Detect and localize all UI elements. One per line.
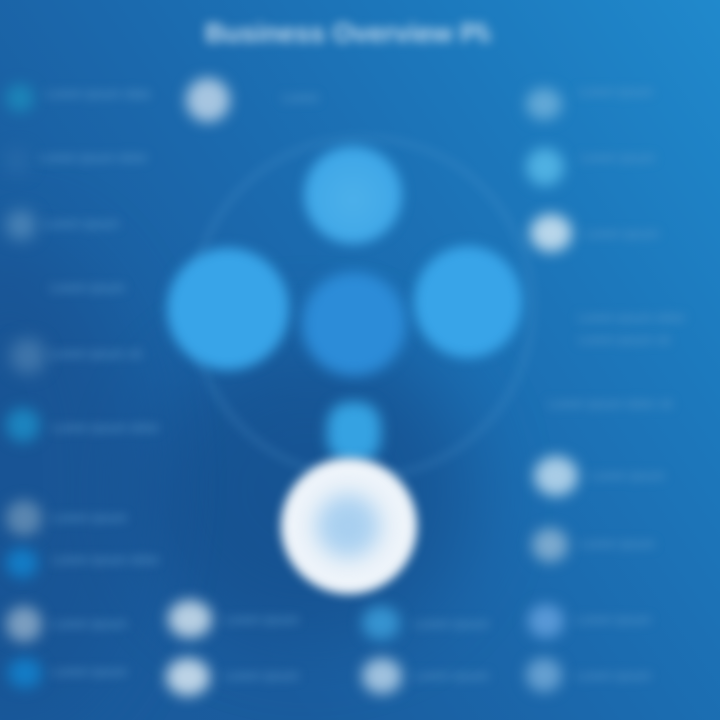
diagram: white hub [281, 458, 417, 594]
infographic background: Lorem ipsum [580, 536, 655, 551]
diagram: right node [414, 246, 522, 358]
infographic background: Lorem ipsum [414, 668, 489, 683]
infographic background: Lorem ipsum dolor [52, 552, 160, 567]
infographic background: Lorem ipsum [52, 510, 127, 525]
top middle text: Lorem [282, 90, 319, 105]
infographic background: Lorem ipsum dolor [578, 310, 686, 325]
infographic background: Lorem ipsum [52, 664, 127, 679]
bottom middle text [224, 612, 489, 683]
dark vignette behind diagram [150, 340, 470, 640]
infographic background: Lorem ipsum [50, 280, 125, 295]
infographic background: Lorem ipsum sit [50, 346, 142, 361]
infographic background: Lorem ipsum data [46, 86, 150, 101]
infographic background: Lorem ipsum dolor sit [548, 396, 672, 411]
infographic background: Lorem ipsum [576, 668, 651, 683]
infographic background: Lorem ipsum [224, 612, 299, 627]
diagram: left node [167, 248, 289, 370]
right column icons [520, 82, 587, 699]
infographic background: Lorem ipsum [590, 468, 665, 483]
bottom middle icons [156, 590, 411, 706]
diagram: connector node [327, 402, 381, 462]
diagram: top node [304, 146, 402, 244]
infographic background: Lorem ipsum [578, 84, 653, 99]
right column text [548, 84, 686, 683]
infographic background: Lorem ipsum [224, 668, 299, 683]
left dark edge [0, 240, 140, 720]
infographic background: Lorem ipsum [576, 612, 651, 627]
diagram: white hub inner [316, 494, 380, 558]
infographic background: Lorem ipsum sit [578, 332, 670, 347]
infographic background: Lorem ipsum [44, 216, 119, 231]
infographic background: Lorem ipsum [584, 226, 659, 241]
infographic background: Lorem ipsum dolor [40, 150, 148, 165]
infographic background: Lorem ipsum [580, 150, 655, 165]
infographic background: Lorem ipsum [52, 616, 127, 631]
top middle icon [186, 78, 230, 122]
left column text [40, 86, 160, 679]
infographic background: Lorem ipsum [414, 616, 489, 631]
diagram: orbit ring [190, 135, 535, 480]
infographic background: Lorem ipsum dolor [52, 420, 160, 435]
diagram: centre node [302, 272, 406, 376]
left column icons [0, 81, 50, 693]
